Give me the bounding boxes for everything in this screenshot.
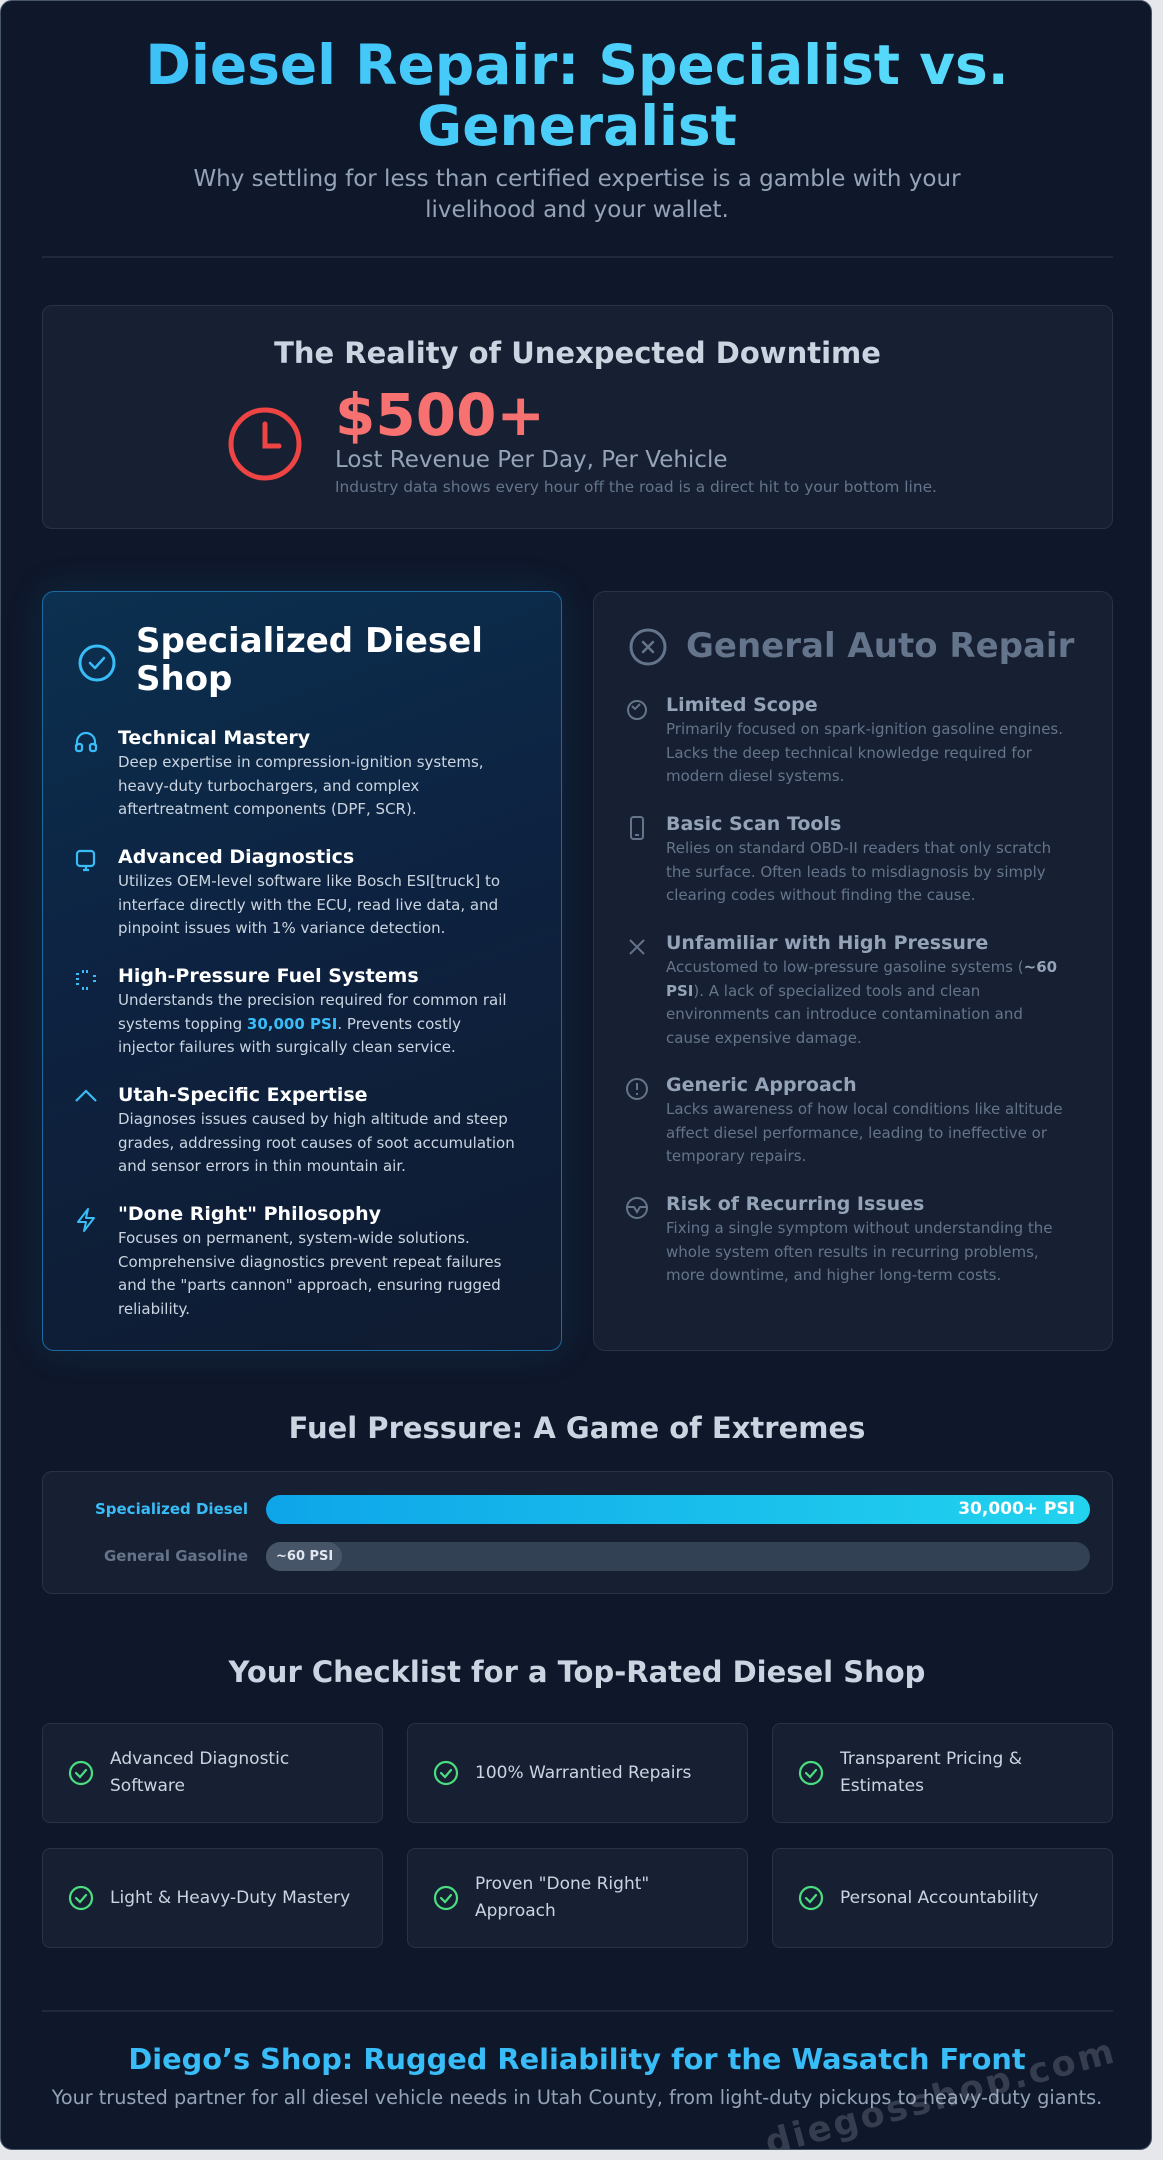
stat label: Lost Revenue Per Day, Per Vehicle — [335, 447, 728, 473]
bar: gasoline 60 psi — [266, 1542, 1090, 1571]
title: Generalist — [417, 94, 737, 158]
item: unfamiliar pressure: Accustomed to low-pressure gasoline systems (~60 PSI). A lack of specialized tools and clean environments can introduce contamination and cause expensive damage. — [666, 958, 1057, 1046]
item: high-pressure fuel: High-Pressure Fuel Systems — [118, 965, 419, 987]
heading: checklist: Your Checklist for a Top-Rated Diesel Shop — [229, 1655, 925, 1689]
label: specialized diesel: Specialized Diesel — [95, 1500, 248, 1518]
heading: fuel pressure: Fuel Pressure: A Game of Extremes — [289, 1411, 865, 1445]
label: general gasoline: General Gasoline — [104, 1547, 248, 1565]
heading: general: General Auto Repair — [686, 626, 1074, 666]
checklist item 5 — [407, 1848, 748, 1948]
icon: clock — [228, 408, 302, 480]
bar chart: fuel pressure — [42, 1471, 1113, 1594]
footer text: Your trusted partner for all diesel vehicle needs in Utah County, from light-duty pickups to heavy-duty giants. — [52, 2086, 1102, 2109]
checklist item 2 — [407, 1723, 748, 1823]
heading: downtime: The Reality of Unexpected Downtime — [274, 336, 881, 370]
item: recurring issues: Risk of Recurring Issues — [666, 1193, 924, 1215]
stat: $500+: $500+ — [335, 381, 545, 449]
bar: gasoline 60 psi: ~60 PSI — [276, 1549, 333, 1564]
checklist item 3 — [772, 1723, 1113, 1823]
checklist item 6 — [772, 1848, 1113, 1948]
item: recurring issues: Fixing a single symptom without understanding the whole system often results in recurring problems, more downtime, and higher long-term costs. — [666, 1219, 1053, 1284]
checklist item 4 — [42, 1848, 383, 1948]
checklist item 6: Personal Accountability — [840, 1888, 1038, 1908]
item: recurring issues — [626, 1193, 1053, 1284]
footer title: Diego’s Shop: Rugged Reliability for the Wasatch Front — [128, 2042, 1026, 2076]
checklist item 5: Proven "Done Right" Approach — [475, 1874, 649, 1921]
title: Diesel Repair: Specialist vs. — [145, 33, 1009, 97]
bar: diesel 30000 psi: 30,000+ PSI — [958, 1499, 1075, 1519]
checklist item 1: Advanced Diagnostic Software — [110, 1749, 289, 1796]
subtitle: Why settling for less than certified expertise is a gamble with your livelihood and your wallet. — [193, 166, 961, 223]
panel: general auto repair — [593, 591, 1113, 1351]
item: utah expertise: Utah-Specific Expertise — [118, 1084, 368, 1106]
heading: specialized: Shop — [136, 659, 232, 699]
icon: x circle — [630, 628, 666, 666]
icon: check circle — [78, 644, 116, 682]
checklist item 3: Transparent Pricing & Estimates — [840, 1749, 1022, 1796]
item: done right: Focuses on permanent, system-wide solutions. Comprehensive diagnostics prevent repeat failures and the "parts cannon" approach, ensuring rugged reliability. — [118, 1229, 501, 1318]
item: utah expertise — [75, 1084, 515, 1175]
panel: specialized diesel shop — [42, 591, 562, 1351]
item: advanced diagnostics: Advanced Diagnostics — [118, 846, 354, 868]
item: limited scope: Primarily focused on spark-ignition gasoline engines. Lacks the deep technical knowledge required for modern diesel systems. — [666, 720, 1063, 785]
heading: specialized: Specialized Diesel — [136, 621, 483, 661]
title — [1, 35, 1153, 157]
item: done right: "Done Right" Philosophy — [118, 1203, 381, 1225]
item: done right — [77, 1203, 501, 1318]
item: high-pressure fuel: Understands the precision required for common rail systems topping 30,000 PSI. Prevents costly injector failures with surgically clean service. — [118, 991, 507, 1056]
heading: specialized — [136, 621, 483, 699]
item: advanced diagnostics: Utilizes OEM-level software like Bosch ESI[truck] to interface directly with the ECU, read live data, and pinpoint issues with 1% variance detection. — [118, 872, 500, 937]
checklist item 1 — [42, 1723, 383, 1823]
item: limited scope: Limited Scope — [666, 694, 818, 716]
item: technical mastery: Deep expertise in compression-ignition systems, heavy-duty turbochargers, and complex aftertreatment components (DPF, SCR). — [118, 753, 484, 818]
item: generic approach: Lacks awareness of how local conditions like altitude affect diesel performance, leading to ineffective or temporary repairs. — [666, 1100, 1063, 1165]
item: advanced diagnostics — [76, 846, 500, 937]
item: basic scan tools: Basic Scan Tools — [666, 813, 841, 835]
item: basic scan tools — [630, 813, 1051, 904]
item: unfamiliar pressure: Unfamiliar with High Pressure — [666, 932, 988, 954]
item: technical mastery — [74, 727, 484, 818]
item: technical mastery: Technical Mastery — [118, 727, 310, 749]
item: utah expertise: Diagnoses issues caused by high altitude and steep grades, addressing root causes of soot accumulation and sensor errors in thin mountain air. — [118, 1110, 515, 1175]
checklist item 4: Light & Heavy-Duty Mastery — [110, 1888, 350, 1908]
item: generic approach: Generic Approach — [666, 1074, 857, 1096]
item: generic approach — [626, 1074, 1063, 1165]
checklist item 2: 100% Warrantied Repairs — [475, 1762, 691, 1782]
stat note: Industry data shows every hour off the road is a direct hit to your bottom line. — [335, 478, 937, 496]
item: basic scan tools: Relies on standard OBD-II readers that only scratch the surface. Often leads to misdiagnosis by simply clearing codes without finding the cause. — [666, 839, 1051, 904]
item: high-pressure fuel — [76, 965, 507, 1056]
item: limited scope — [627, 694, 1063, 785]
bar: diesel 30000 psi — [266, 1495, 1090, 1524]
panel: downtime — [42, 305, 1113, 529]
